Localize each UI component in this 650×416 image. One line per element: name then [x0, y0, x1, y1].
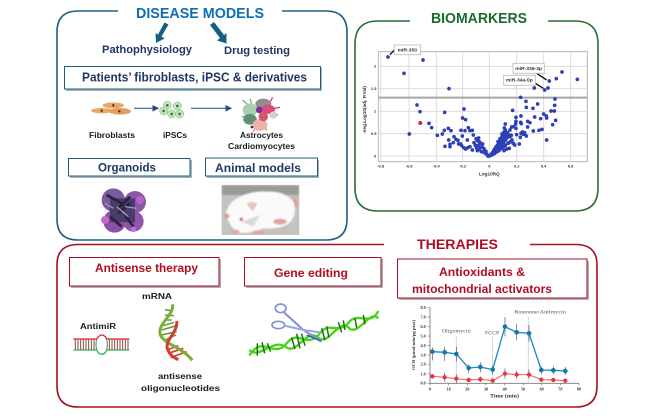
- label: oligomycin: Oligomycin: [442, 329, 472, 334]
- box: animal models: Animal models: [215, 161, 301, 175]
- icon: antisense helix: [160, 304, 192, 360]
- y axis tick labels: 2: [374, 64, 377, 69]
- box: patients' fibroblasts: [64, 66, 322, 91]
- box: gene editing: Gene editing: [274, 266, 348, 280]
- icon: fibroblasts: [91, 102, 131, 115]
- y axis tick labels: 5.0: [420, 333, 426, 338]
- y axis tick labels: 2.0: [420, 362, 426, 367]
- red series: [432, 374, 565, 381]
- y axis title: OCR (pmol/min/µg prot): [411, 319, 416, 370]
- label: antisense: antisense: [158, 372, 203, 381]
- box: antioxidants and mitochondrial activators: [398, 259, 589, 300]
- y axis tick labels: 0.0: [420, 381, 426, 386]
- blue series: [432, 327, 565, 371]
- y axis tick labels: 0: [374, 153, 377, 158]
- x axis tick labels: 40: [503, 386, 507, 391]
- image: organoid: [101, 188, 146, 233]
- arrow: iPSCs to derivatives: [191, 106, 231, 111]
- x axis tick labels: -0.4: [433, 163, 441, 168]
- image: white mouse photo: [222, 185, 299, 235]
- label: iPSCs: iPSCs: [163, 131, 188, 140]
- box: antioxidants and mitochondrial activators: Antioxidants &: [439, 265, 525, 279]
- box: organoids: [68, 158, 192, 178]
- y axis tick labels: 1.5: [371, 86, 377, 91]
- error bars: [432, 317, 565, 383]
- arrow: to pathophysiology: [156, 22, 168, 43]
- x axis tick labels: -0.2: [459, 163, 467, 168]
- box: antisense therapy: Antisense therapy: [95, 261, 198, 275]
- x axis tick labels: 0.2: [514, 163, 520, 168]
- x axis tick labels: 10: [447, 386, 451, 391]
- box: patients' fibroblasts: Patients’ fibroblasts, iPSC & derivatives: [82, 70, 307, 84]
- label: fibroblasts: Fibroblasts: [89, 131, 136, 140]
- icon: astrocytes and cardiomyocytes: [242, 97, 280, 132]
- icon: iPSCs: [160, 101, 184, 118]
- x axis tick labels: -0.6: [406, 163, 413, 168]
- label: FCCP: FCCP: [485, 331, 500, 336]
- label: drug testing: Drug testing: [224, 45, 290, 57]
- chart: volcano plot: [362, 45, 587, 177]
- x axis tick labels: 80: [577, 386, 581, 391]
- x axis tick labels: 50: [521, 386, 525, 391]
- y axis tick labels: [420, 305, 426, 386]
- label: oligonucleotides: oligonucleotides: [141, 384, 221, 393]
- y axis tick labels: 1: [374, 109, 377, 114]
- label: pathophysiology: Pathophysiology: [102, 44, 193, 56]
- y axis tick labels: 0.5: [371, 131, 377, 136]
- x axis tick labels: 0.4: [541, 163, 547, 168]
- box: animal models: [206, 158, 319, 178]
- label: mRNA: mRNA: [142, 292, 172, 301]
- label: astrocytes: Astrocytes: [240, 131, 284, 140]
- x axis tick labels: 20: [465, 386, 469, 391]
- x axis tick labels: -0.8: [377, 163, 385, 168]
- label: rotenone and antimycin: Rotenone/Antimycin: [514, 311, 567, 316]
- panel: therapies: [57, 237, 597, 407]
- y axis tick labels: 3.0: [420, 352, 426, 357]
- x axis title: Log10RQ: [479, 172, 500, 177]
- y axis tick labels: 4.0: [420, 343, 426, 348]
- callout: miR-350: [390, 45, 421, 55]
- heading: disease models: DISEASE MODELS: [136, 5, 264, 22]
- x axis tick labels: 0: [429, 386, 431, 391]
- chart: oxygen consumption rate: [411, 305, 581, 400]
- heading: therapies: THERAPIES: [417, 237, 498, 252]
- callout: miR-34a-5p: [504, 75, 543, 88]
- panel: biomarkers: [355, 11, 598, 211]
- x axis tick labels: 0: [488, 163, 491, 168]
- callout: miR-338-3p: [513, 63, 547, 80]
- data points: [388, 57, 577, 156]
- arrow: fibroblasts to iPSCs: [134, 106, 158, 111]
- x axis tick labels: 0.6: [568, 163, 574, 168]
- y axis tick labels: 7.0: [420, 315, 426, 320]
- y axis tick labels: [371, 64, 377, 158]
- y axis tick labels: 1.0: [420, 371, 426, 376]
- icon: AntimiR hairpin: [73, 335, 129, 354]
- heading: biomarkers: BIOMARKERS: [431, 11, 527, 27]
- x axis tick labels: 60: [540, 386, 544, 391]
- box: antisense therapy: [70, 258, 221, 288]
- y axis tick labels: 6.0: [420, 324, 426, 329]
- x axis tick labels: [377, 163, 574, 168]
- box: gene editing: [244, 258, 383, 288]
- box: antioxidants and mitochondrial activators: mitochondrial activators: [412, 282, 552, 296]
- callout: miR-350: miR-350: [398, 48, 417, 54]
- box: organoids: Organoids: [98, 160, 156, 174]
- y axis tick labels: 8.0: [420, 305, 426, 310]
- x axis tick labels: [429, 386, 581, 391]
- label: AntimiR: AntimiR: [80, 322, 116, 331]
- y axis title: -neg.Log10(adj. P.Val): [362, 86, 367, 134]
- x axis title: Time (min): [490, 395, 520, 400]
- x axis tick labels: 30: [484, 386, 488, 391]
- arrow: to drug testing: [210, 22, 226, 44]
- panel: disease models: [57, 5, 347, 240]
- callout: miR-338-3p: miR-338-3p: [515, 66, 542, 72]
- x axis tick labels: 70: [558, 386, 562, 391]
- label: cardiomyocytes: Cardiomyocytes: [228, 142, 296, 151]
- callout: miR-34a-5p: miR-34a-5p: [506, 78, 533, 84]
- icon: gene editing DNA and scissors: [249, 304, 378, 356]
